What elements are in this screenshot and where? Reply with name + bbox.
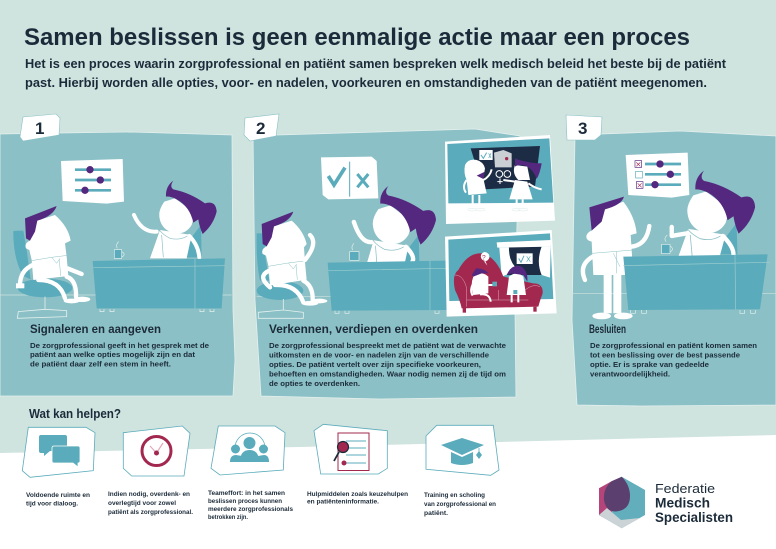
logo wordmark: Medisch — [655, 496, 710, 510]
desk with mug — [93, 242, 225, 312]
caption: teamwork: beslissen proces kunnen — [208, 498, 282, 505]
logo wordmark: Specialisten — [655, 510, 733, 525]
body: step 2 — [269, 341, 507, 388]
photo: on the sofa: ? — [482, 254, 486, 261]
panel: step 2 — [244, 114, 557, 399]
caption: time — [108, 491, 193, 516]
caption: dialogue: Voldoende ruimte en — [26, 492, 90, 499]
speech bubble check and cross — [321, 157, 378, 199]
icon card: team — [211, 426, 285, 475]
desk with mug — [623, 235, 770, 313]
heading: step 2: Verkennen, verdiepen en overdenken — [269, 324, 478, 336]
heading: step 3: Besluiten — [589, 324, 626, 336]
caption: training — [424, 492, 496, 517]
photo: on the sofa — [445, 230, 557, 317]
logo hexagon — [599, 477, 645, 528]
icon card: training — [426, 425, 499, 475]
number tab 2: 2 — [256, 119, 265, 138]
caption: tools: Hulpmiddelen zoals keuzehulpen — [307, 491, 408, 498]
intro text: Het is een proces waarin zorgprofessional en patiënt samen bespreken welk medisch beleid het beste bij de patiënt — [25, 56, 727, 71]
body: step 3: De zorgprofessional en patiënt komen samen — [590, 341, 757, 350]
photo: at the screen — [445, 135, 555, 224]
logo wordmark — [655, 481, 733, 525]
speech bubble with sliders — [61, 159, 124, 204]
caption: time: Indien nodig, overdenk- en — [108, 491, 190, 498]
doctor behind desk — [134, 181, 217, 258]
heading: step 1: Signaleren en aangeven — [30, 324, 161, 336]
panel: step 1 — [0, 114, 235, 396]
body: step 1: patiënt aan welke opties mogelijk zijn en dat — [30, 350, 196, 359]
body: step 3 — [590, 341, 757, 378]
caption: teamwork: betrokken zijn. — [208, 514, 248, 521]
caption: dialogue — [26, 492, 90, 508]
caption: teamwork — [208, 490, 294, 521]
body: step 3: verantwoordelijkheid. — [590, 370, 670, 378]
caption: tools — [307, 491, 408, 506]
number tab 1: 1 — [35, 119, 44, 138]
icon card: speech bubbles — [22, 427, 95, 477]
panel: step 3 — [566, 115, 776, 406]
illustration: conversation with options — [0, 159, 232, 318]
body: step 2: behoeften en omstandigheden. Waar nodig nemen zij de tijd om — [269, 370, 507, 378]
caption: training: patiënt. — [424, 510, 448, 517]
caption: teamwork: Teameffort: in het samen — [208, 490, 285, 497]
body: step 3: optie. Er is sprake van gedeelde — [590, 360, 709, 369]
body: step 2: De zorgprofessional bespreekt met de patiënt wat de verwachte — [269, 341, 506, 350]
doctor — [672, 171, 755, 256]
body: step 2: de opties te overdenken. — [269, 379, 360, 388]
speech bubble with checklist sliders — [626, 153, 689, 198]
caption: time: patiënt als zorgprofessional. — [108, 509, 193, 516]
patient on chair — [13, 206, 90, 318]
desk with mug — [328, 243, 447, 313]
body: step 2: uitkomsten en de voor- en nadelen zijn van de verschillende — [269, 350, 489, 360]
number tab 2 — [244, 114, 279, 141]
number tab 3 — [566, 115, 602, 140]
heading: what can help: Wat kan helpen? — [29, 407, 121, 421]
body: step 2: opties. De patiënt vertelt over zijn specifieke voorkeuren, — [269, 360, 481, 369]
caption: dialogue: tijd voor dialoog. — [26, 500, 78, 508]
body: step 1: de patiënt daar zelf een stem in heeft. — [30, 360, 171, 368]
caption: teamwork: meerdere zorgprofessionals — [208, 506, 294, 513]
intro text: past. Hierbij worden alle opties, voor- en nadelen, voorkeuren en omstandigheden van de patiënt meegenomen. — [25, 75, 707, 90]
number tab 1 — [20, 114, 60, 141]
body: step 1: De zorgprofessional geeft in het gesprek met de — [30, 341, 209, 350]
icon card: clock — [123, 426, 190, 476]
icon card: tools — [314, 424, 387, 474]
doctor — [354, 186, 436, 271]
body: step 1 — [30, 341, 209, 368]
patient standing — [583, 197, 649, 319]
patient thinking — [257, 212, 327, 318]
caption: time: overlegtijd voor zowel — [108, 500, 176, 507]
illustration: deciding together — [572, 153, 776, 319]
caption: tools: en patiënteninformatie. — [307, 498, 379, 506]
caption: training: van zorgprofessional en — [424, 501, 496, 508]
logo wordmark: Federatie — [655, 481, 715, 496]
logo: Federatie Medisch Specialisten — [599, 477, 733, 528]
body: step 3: tot een beslissing over de best passende — [590, 350, 740, 360]
number tab 3: 3 — [578, 119, 587, 138]
intro text — [25, 56, 727, 90]
caption: training: Training en scholing — [424, 492, 485, 499]
title: Samen beslissen is geen eenmalige actie maar een proces — [24, 24, 690, 51]
illustration: exploring options — [257, 157, 447, 318]
